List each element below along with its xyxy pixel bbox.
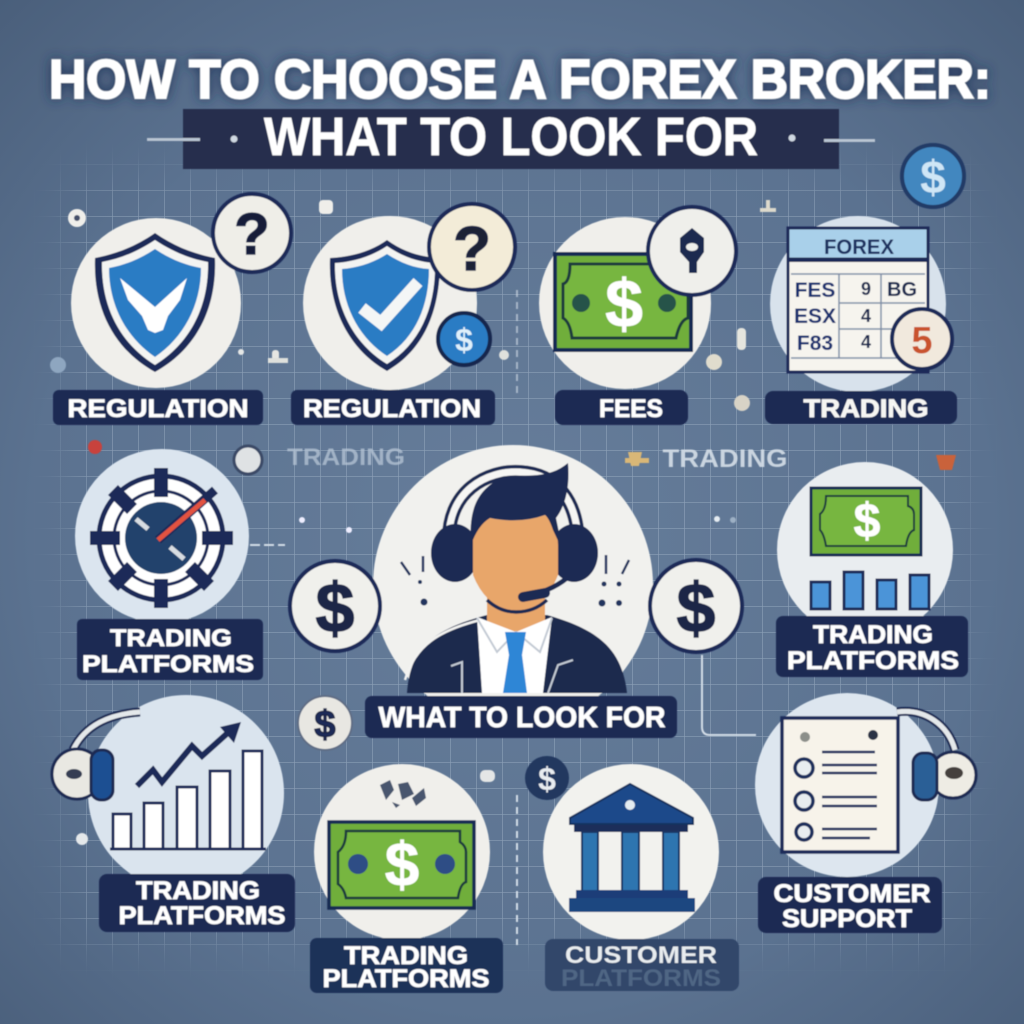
label: trading platforms [310, 938, 503, 993]
label: trading platforms [776, 616, 968, 677]
label: regulation [291, 390, 495, 425]
label: fees [555, 390, 688, 425]
icon: banknote: $ [854, 495, 881, 548]
panel: fees [539, 207, 736, 425]
label: regulation: REGULATION [303, 395, 481, 423]
icon: banknote: $ [605, 266, 643, 342]
icon: forex table: FOREX [824, 236, 894, 259]
panel: bottom banknote [310, 764, 503, 993]
icon: question badge tinted: ? [453, 215, 491, 284]
icon: forex table: BG [887, 279, 917, 301]
connector lines [250, 290, 756, 945]
icon: small dollar badge: $ [314, 704, 336, 746]
bar chart [110, 751, 266, 849]
label: trading [765, 391, 957, 424]
icon: bank [569, 784, 695, 912]
label: trading platforms: PLATFORMS [82, 651, 254, 678]
icon: question badge tinted [429, 204, 515, 290]
icon: forex table [788, 228, 928, 372]
icon: badge with pin [648, 207, 736, 295]
icon: dial [90, 468, 233, 608]
icon: small blue dollar badge [438, 313, 490, 365]
panel: trading platforms right [776, 462, 968, 677]
icon: forex table: FES [795, 279, 835, 302]
icon: right dollar badge [650, 560, 742, 652]
icon: left dollar badge: $ [316, 569, 354, 647]
label: trading: TRADING [804, 395, 928, 423]
icon: red number badge [892, 309, 952, 369]
label: customer support: CUSTOMER [774, 880, 930, 908]
label: trading platforms: PLATFORMS [118, 902, 286, 930]
icon: small dollar badge [298, 696, 352, 750]
label: trading platforms: PLATFORMS [787, 647, 959, 675]
label: customer: PLATFORMS [561, 965, 721, 992]
panel: regulation 2 [291, 204, 515, 425]
icon: question badge [213, 194, 291, 272]
panel: forex table [765, 216, 957, 424]
icon: left dollar badge [290, 561, 380, 651]
panel: regulation 1 [53, 194, 291, 425]
label: customer support: SUPPORT [782, 905, 912, 933]
icon: noisy smudge [380, 780, 426, 808]
icon: right dollar badge: $ [677, 569, 715, 647]
label: regulation: REGULATION [68, 395, 248, 423]
icon: banknote: $ [385, 831, 419, 900]
label: trading platforms: TRADING [813, 621, 933, 649]
icon: blue dollar badge [902, 145, 964, 207]
label: trading platforms [99, 874, 295, 932]
icon: rising arrow [137, 722, 241, 786]
icon: forex table: 4 [861, 306, 871, 326]
label: trading platforms: PLATFORMS [322, 965, 490, 993]
label: regulation [53, 390, 263, 425]
icon: blue bars [811, 572, 929, 609]
label: trading platforms [77, 619, 263, 680]
faint label left: TRADING [287, 444, 405, 471]
panel: growth chart [52, 695, 295, 932]
icon: headset left [52, 712, 140, 800]
panel: trading platforms gauge [75, 449, 263, 680]
icon: shield with eagle [95, 233, 215, 372]
icon: blue dollar badge: $ [920, 151, 946, 203]
icon: shield with check [330, 240, 440, 371]
label: trading platforms: TRADING [344, 942, 468, 970]
icon: forex table: 4 [861, 332, 871, 352]
label: fees: FEES [599, 395, 663, 423]
icon: forex table: ESX [794, 305, 836, 328]
label: trading platforms: TRADING [110, 625, 232, 652]
subtitle band: WHAT TO LOOK FOR [264, 107, 758, 167]
icon: forex table: F83 [797, 332, 833, 355]
panel: bank [543, 764, 739, 992]
icon: agent [401, 463, 629, 693]
label: customer support [758, 877, 942, 933]
label: what to look for: WHAT TO LOOK FOR [378, 702, 666, 734]
icon: question badge: ? [234, 202, 270, 267]
panel: central support agent [365, 445, 677, 738]
icon: banknote [329, 822, 474, 908]
icon: headset right [897, 711, 976, 800]
icon: dark dollar badge: $ [538, 761, 556, 797]
icon: forex table: 9 [861, 279, 871, 299]
icon: banknote [811, 488, 921, 555]
label: trading platforms: TRADING [136, 877, 260, 905]
label: customer: CUSTOMER [565, 942, 717, 969]
faint label right: TRADING [662, 445, 788, 473]
icon: small blue dollar badge: $ [455, 322, 473, 358]
icon: banknote [555, 254, 691, 350]
icon: red number badge: 5 [911, 320, 933, 362]
decorative blobs [50, 200, 956, 845]
icon: checklist document [782, 718, 898, 852]
panel: customer support [755, 693, 976, 933]
label: customer [545, 939, 739, 992]
icon: dark dollar badge [525, 756, 569, 800]
